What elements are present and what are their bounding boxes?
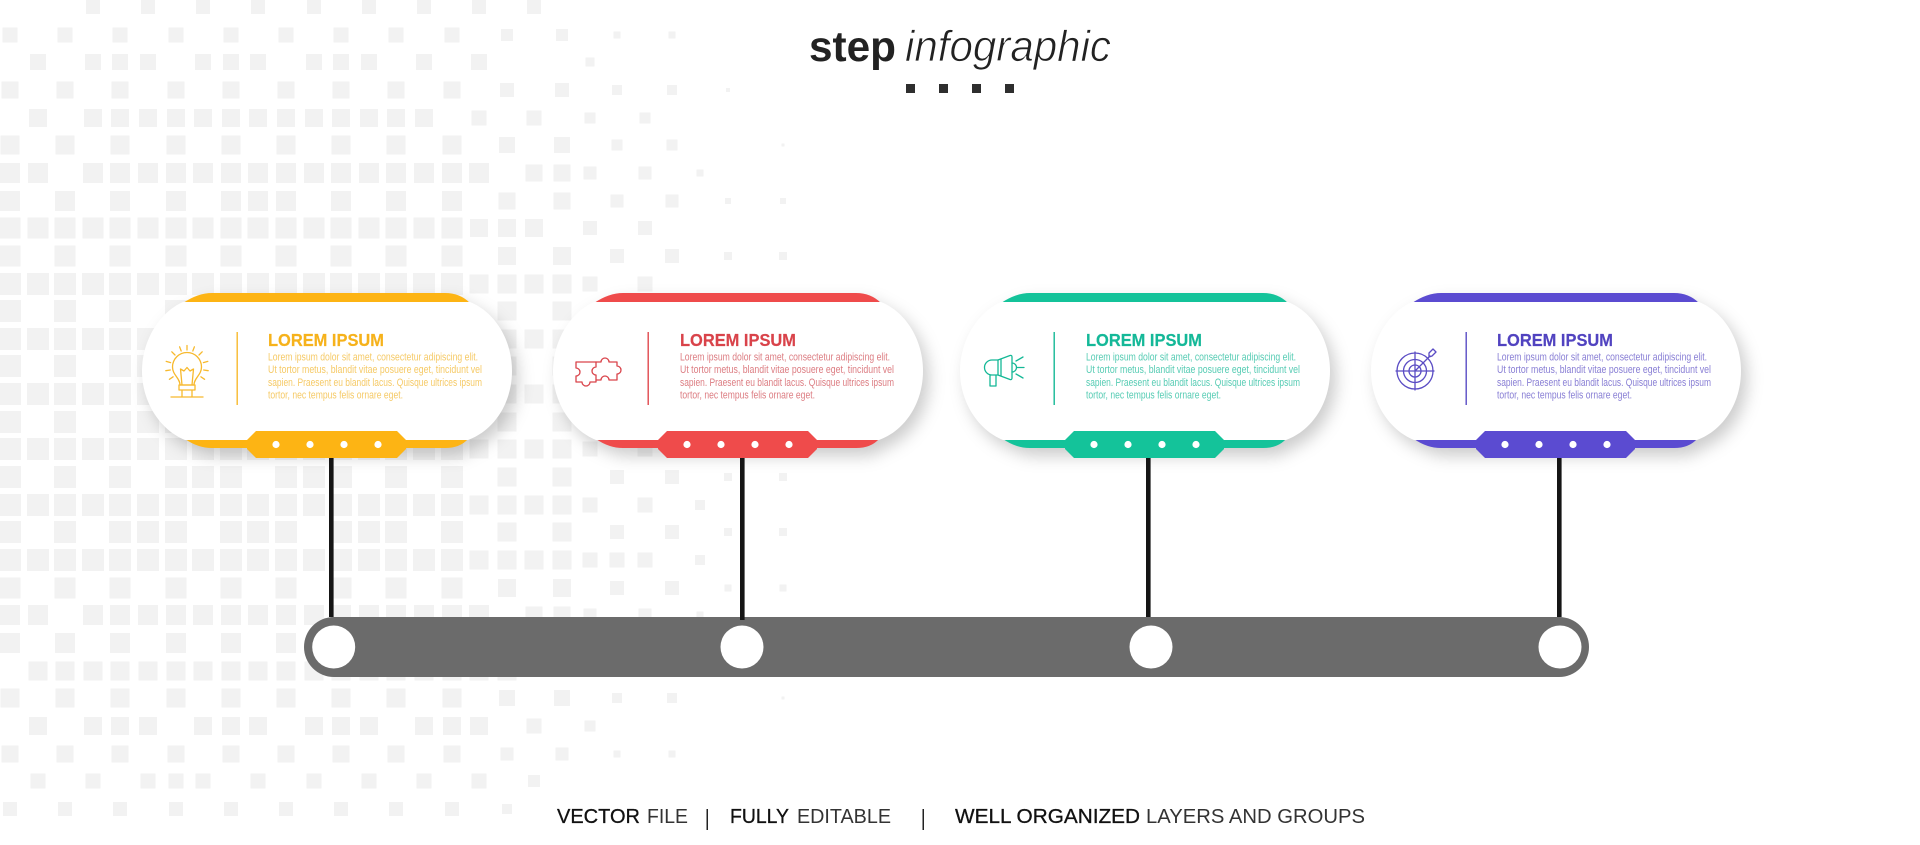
- body text: Lorem ipsum dolor sit amet, consectetur adipiscing elit.: [268, 352, 478, 364]
- body text: [268, 352, 482, 402]
- title: step: [809, 23, 896, 71]
- heading: LOREM IPSUM: [1497, 330, 1613, 350]
- body text: Ut tortor metus, blandit vitae posuere eget, tincidunt vel: [268, 364, 482, 376]
- body text: Lorem ipsum dolor sit amet, consectetur adipiscing elit.: [680, 352, 890, 364]
- title: infographic: [905, 22, 1111, 71]
- body text: sapien. Praesent eu blandit lacus. Quisque ultrices ipsum: [680, 377, 894, 389]
- number tag: [1065, 431, 1224, 458]
- footer text: VECTOR: [557, 805, 640, 828]
- background pattern: grey squares: [10, 7, 783, 809]
- body text: Lorem ipsum dolor sit amet, consectetur adipiscing elit.: [1086, 352, 1296, 364]
- footer text: FILE: [647, 805, 688, 828]
- heading: LOREM IPSUM: [1086, 330, 1202, 350]
- divider: [1466, 332, 1467, 405]
- body text: [680, 352, 894, 402]
- footer text: EDITABLE: [797, 805, 891, 828]
- timeline bar: [304, 617, 1589, 677]
- body text: Ut tortor metus, blandit vitae posuere eget, tincidunt vel: [1497, 364, 1711, 376]
- body text: [1086, 352, 1300, 402]
- panel: step 4: [1371, 293, 1741, 458]
- footer text: LAYERS AND GROUPS: [1146, 805, 1365, 828]
- body text: Ut tortor metus, blandit vitae posuere eget, tincidunt vel: [680, 364, 894, 376]
- icon: megaphone: [985, 355, 1024, 386]
- body text: sapien. Praesent eu blandit lacus. Quisque ultrices ipsum: [1497, 377, 1711, 389]
- footer text: [557, 805, 1365, 830]
- number tag: [1476, 431, 1635, 458]
- divider: [1054, 332, 1055, 405]
- panel: step 3: [960, 293, 1330, 458]
- body text: tortor, nec tempus felis ornare eget.: [1086, 390, 1221, 402]
- panel: step 2: [553, 293, 923, 458]
- panel: step 1: [142, 293, 512, 458]
- body text: tortor, nec tempus felis ornare eget.: [680, 390, 815, 402]
- body text: sapien. Praesent eu blandit lacus. Quisque ultrices ipsum: [1086, 377, 1300, 389]
- footer text: FULLY: [730, 805, 789, 828]
- heading: LOREM IPSUM: [680, 330, 796, 350]
- heading: LOREM IPSUM: [268, 330, 384, 350]
- body text: Lorem ipsum dolor sit amet, consectetur adipiscing elit.: [1497, 352, 1707, 364]
- footer text: WELL ORGANIZED: [955, 805, 1140, 828]
- number tag: [658, 431, 817, 458]
- icon: target: [1396, 349, 1436, 390]
- body text: tortor, nec tempus felis ornare eget.: [1497, 390, 1632, 402]
- title: [809, 22, 1111, 71]
- body text: tortor, nec tempus felis ornare eget.: [268, 390, 403, 402]
- title dots: [906, 84, 1014, 93]
- body text: sapien. Praesent eu blandit lacus. Quisque ultrices ipsum: [268, 377, 482, 389]
- body text: Ut tortor metus, blandit vitae posuere eget, tincidunt vel: [1086, 364, 1300, 376]
- divider: [236, 332, 238, 405]
- icon: puzzle: [576, 358, 621, 386]
- body text: [1497, 352, 1711, 402]
- number tag: [247, 431, 406, 458]
- connector stems: [329, 458, 1562, 620]
- icon: light bulb: [166, 346, 208, 397]
- divider: [648, 332, 649, 405]
